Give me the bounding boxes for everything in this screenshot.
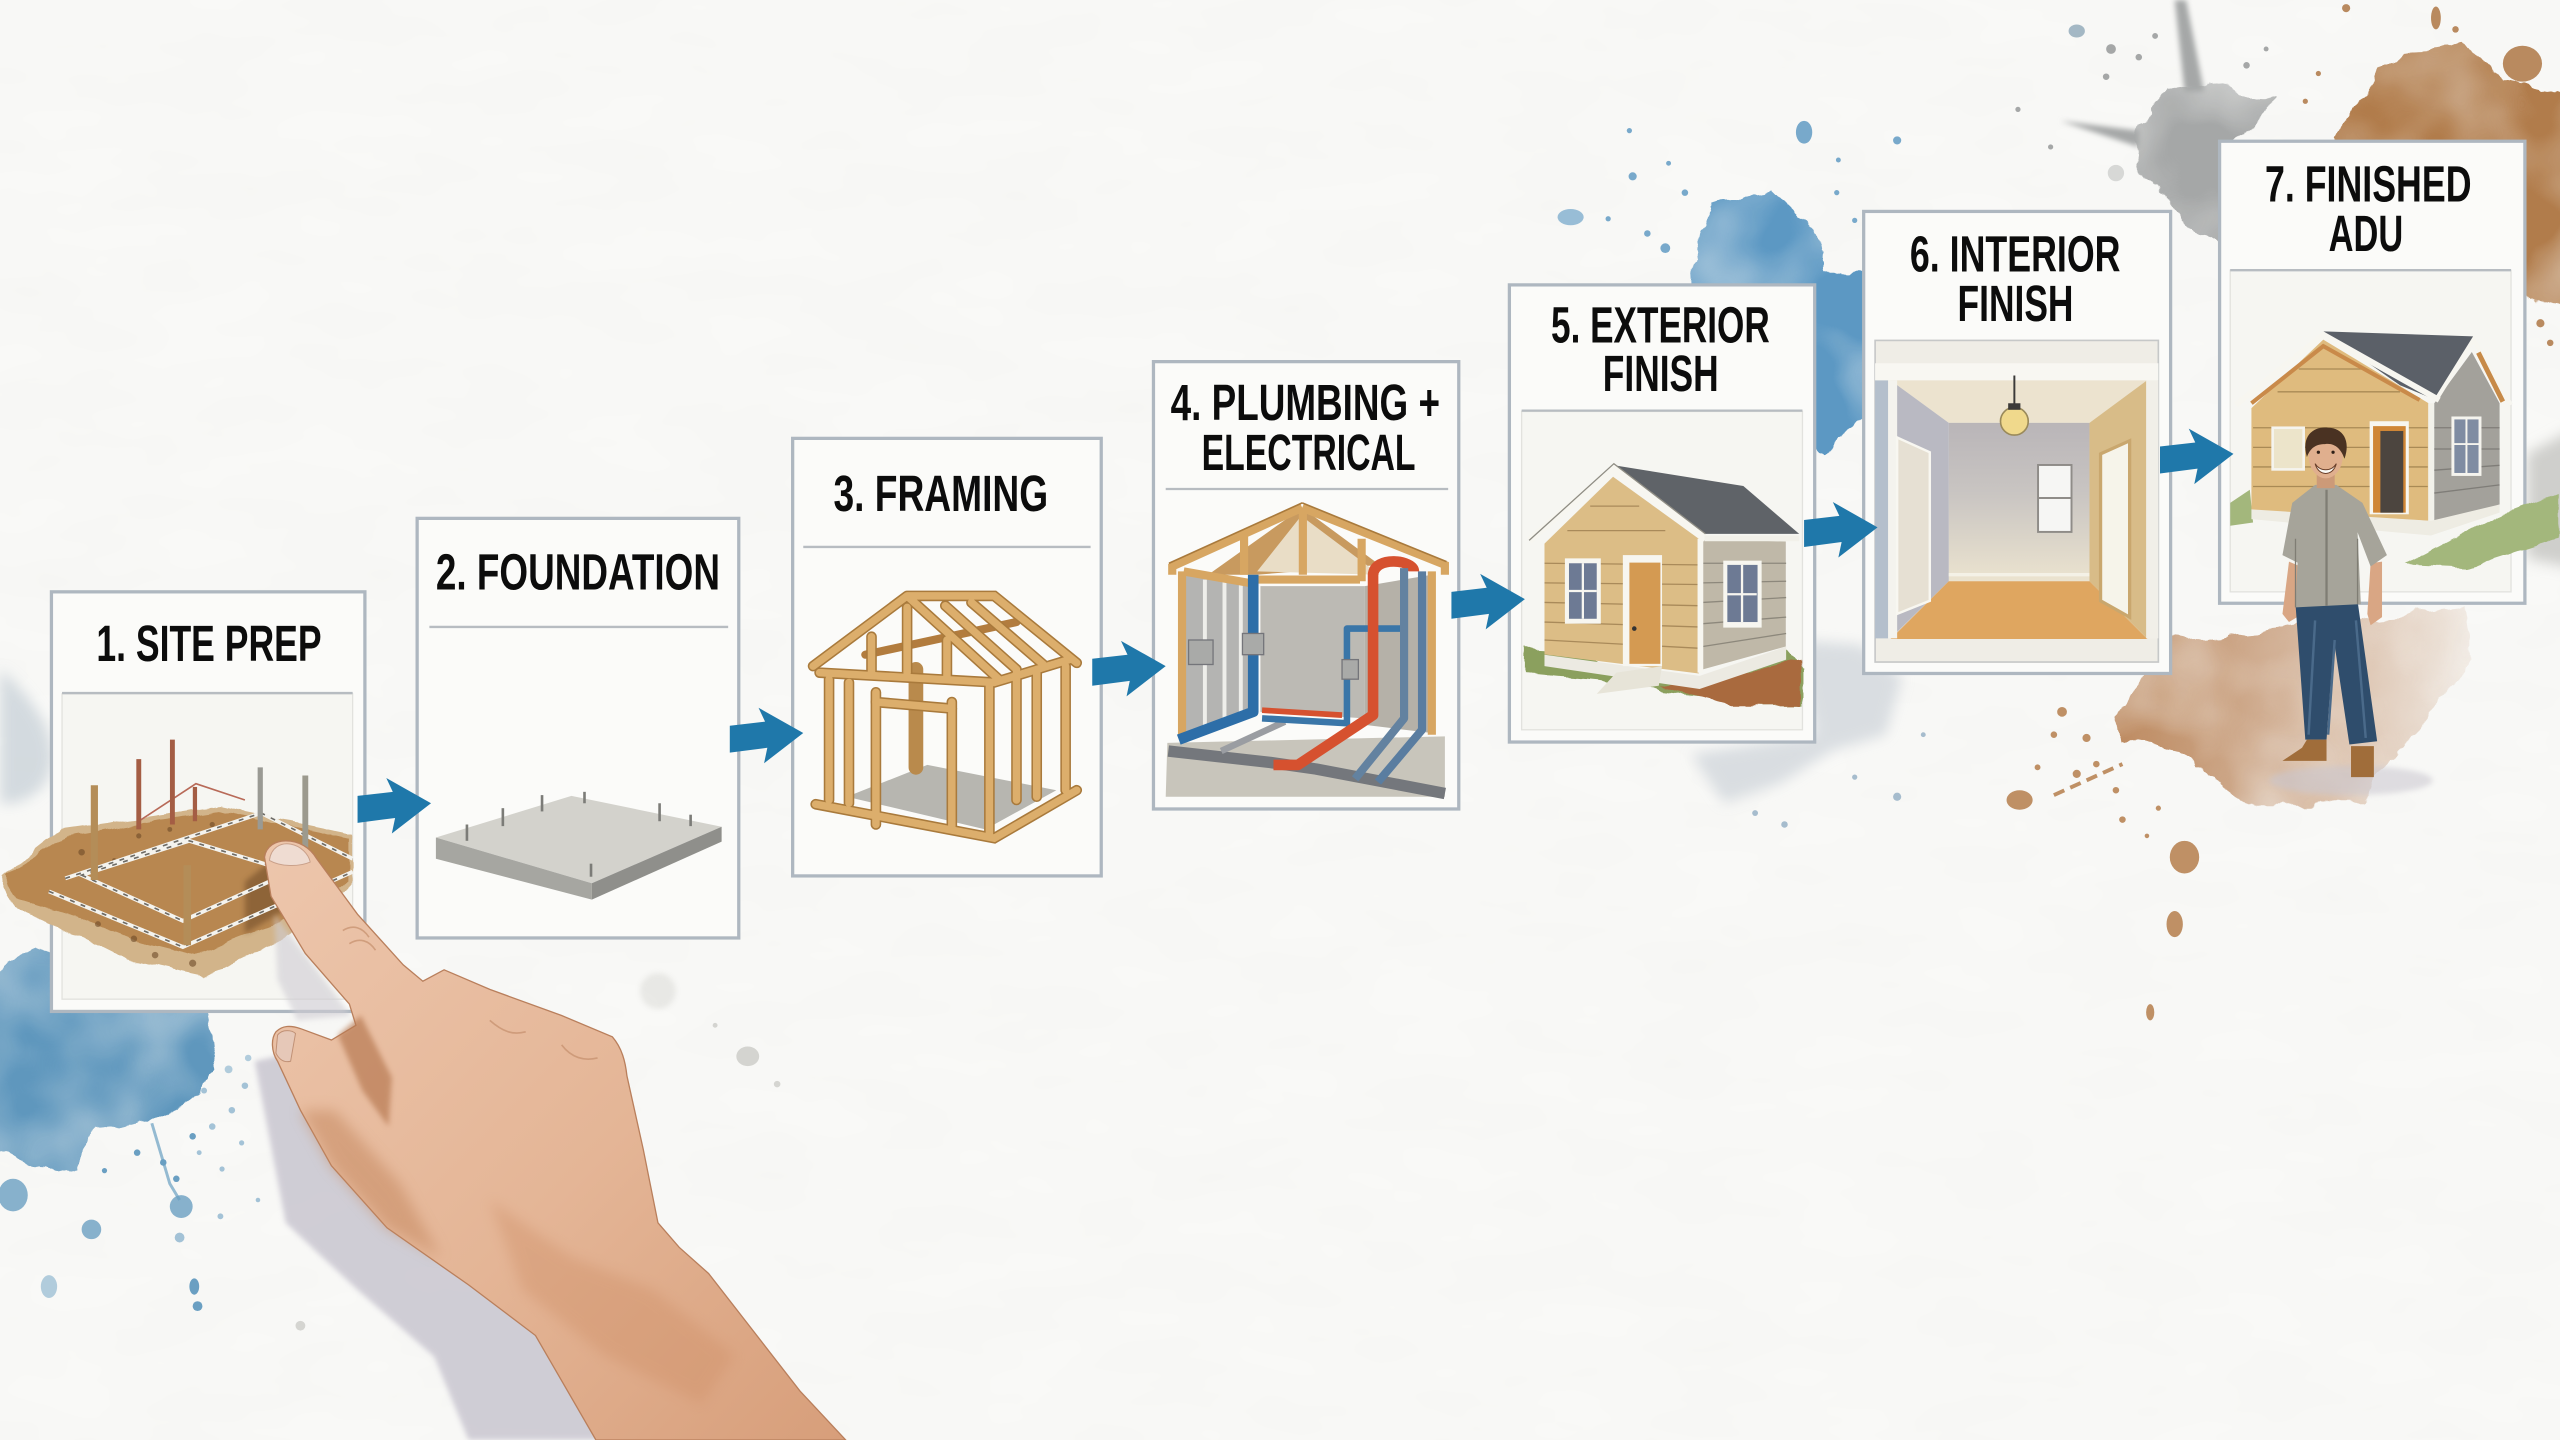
panel 2 divider	[429, 626, 728, 628]
panel 4 frame	[1153, 362, 1459, 809]
panel 5 frame	[1509, 285, 1815, 742]
panel 5 heading	[1551, 297, 1770, 402]
arrow: 3 to 4	[1092, 641, 1166, 696]
splash: blue bottom-left	[0, 950, 219, 1169]
panel 5 image area	[1522, 411, 1802, 730]
arrow: 1 to 2	[358, 778, 431, 833]
panel 2 frame	[417, 518, 739, 938]
hand outline	[264, 841, 846, 1440]
panel 7 frame	[2220, 141, 2525, 603]
panel: step 5 exterior finish	[1509, 285, 1815, 742]
panel 7 heading	[2265, 155, 2472, 262]
panel 2 heading: 2. FOUNDATION	[436, 543, 720, 600]
panel: step 7 finished ADU	[2220, 141, 2557, 603]
arrow: 2 to 3	[730, 708, 803, 763]
illustration: smiling man standing	[2269, 428, 2433, 795]
knuckle and wrist shading	[490, 1200, 735, 1404]
panel: step 4 plumbing + electrical	[1153, 362, 1459, 809]
arrow: 5 to 6	[1804, 502, 1878, 558]
panel 1 divider	[62, 692, 353, 694]
panel: step 3 framing	[793, 438, 1101, 876]
panel 6 frame	[1864, 211, 2171, 673]
panel 4 heading: 4. PLUMBING +	[1171, 374, 1440, 431]
illustration: soil site with stakes and string	[0, 740, 353, 976]
panel: step 1 site prep	[0, 592, 365, 1011]
panel 3 frame	[793, 438, 1101, 876]
panel 1 image area	[62, 694, 353, 999]
splash: brown bottom right	[2116, 607, 2465, 803]
splatter: blue-grey lower middle	[1752, 732, 1926, 828]
panel 3 heading: 3. FRAMING	[833, 465, 1048, 522]
panel 4 heading: ELECTRICAL	[1202, 424, 1416, 481]
illustration: concrete slab with anchor bolts	[436, 792, 722, 900]
panel 5 heading: 5. EXTERIOR	[1551, 297, 1770, 354]
panel 7 heading: 7. FINISHED	[2265, 155, 2472, 212]
splatter: grey spots near panel two	[296, 973, 780, 1331]
splash: grey top right	[2015, 0, 2279, 242]
splash: light grey lower middle	[1691, 640, 1902, 803]
splatter: blue bottom-left	[0, 1055, 260, 1311]
splatter: brown top right	[2303, 4, 2553, 346]
arrow: 4 to 5	[1451, 574, 1525, 629]
panel 3 divider	[803, 546, 1091, 548]
panel 6 heading	[1910, 226, 2120, 332]
crook between thumb and finger	[338, 1016, 392, 1127]
panel 7 heading: ADU	[2329, 205, 2403, 262]
splatter: brown bottom right	[2007, 707, 2199, 1020]
hand pointing at step 1	[264, 841, 846, 1440]
fingernail: index	[269, 844, 310, 866]
arrow: 6 to 7	[2160, 429, 2233, 484]
panel 1 heading: 1. SITE PREP	[96, 615, 322, 672]
illustration: interior room with lamp	[1875, 340, 2158, 662]
knuckle highlights and creases	[343, 927, 598, 1059]
splash: grey right	[2527, 428, 2560, 568]
panel 4 heading	[1171, 374, 1440, 481]
fingernail: thumb	[276, 1031, 296, 1062]
panel 6 heading: 6. INTERIOR	[1910, 226, 2120, 283]
shadow of index finger	[274, 914, 351, 1020]
splash: grey left	[0, 669, 53, 804]
splash: brown top right	[2335, 46, 2560, 313]
illustration: framed wall with pipes and boxes	[1166, 503, 1447, 797]
panel 6 heading: FINISH	[1958, 275, 2073, 332]
panel 1 frame	[51, 592, 365, 1011]
illustration: small sided house	[1525, 464, 1802, 705]
panel 5 heading: FINISH	[1603, 345, 1719, 402]
shadow of hand	[255, 1045, 637, 1440]
panel 7 divider	[2230, 269, 2511, 271]
splatter: blue top centre	[1558, 121, 1901, 253]
panel 7 image area	[2230, 270, 2511, 592]
splash: blue top centre	[1691, 191, 1874, 454]
illustration: finished house	[2230, 331, 2557, 568]
panel 4 divider	[1166, 488, 1448, 490]
illustration: timber frame	[813, 596, 1077, 838]
panel 5 divider	[1522, 410, 1802, 412]
panel: step 2 foundation	[417, 518, 739, 938]
panel: step 6 interior finish	[1864, 211, 2171, 673]
